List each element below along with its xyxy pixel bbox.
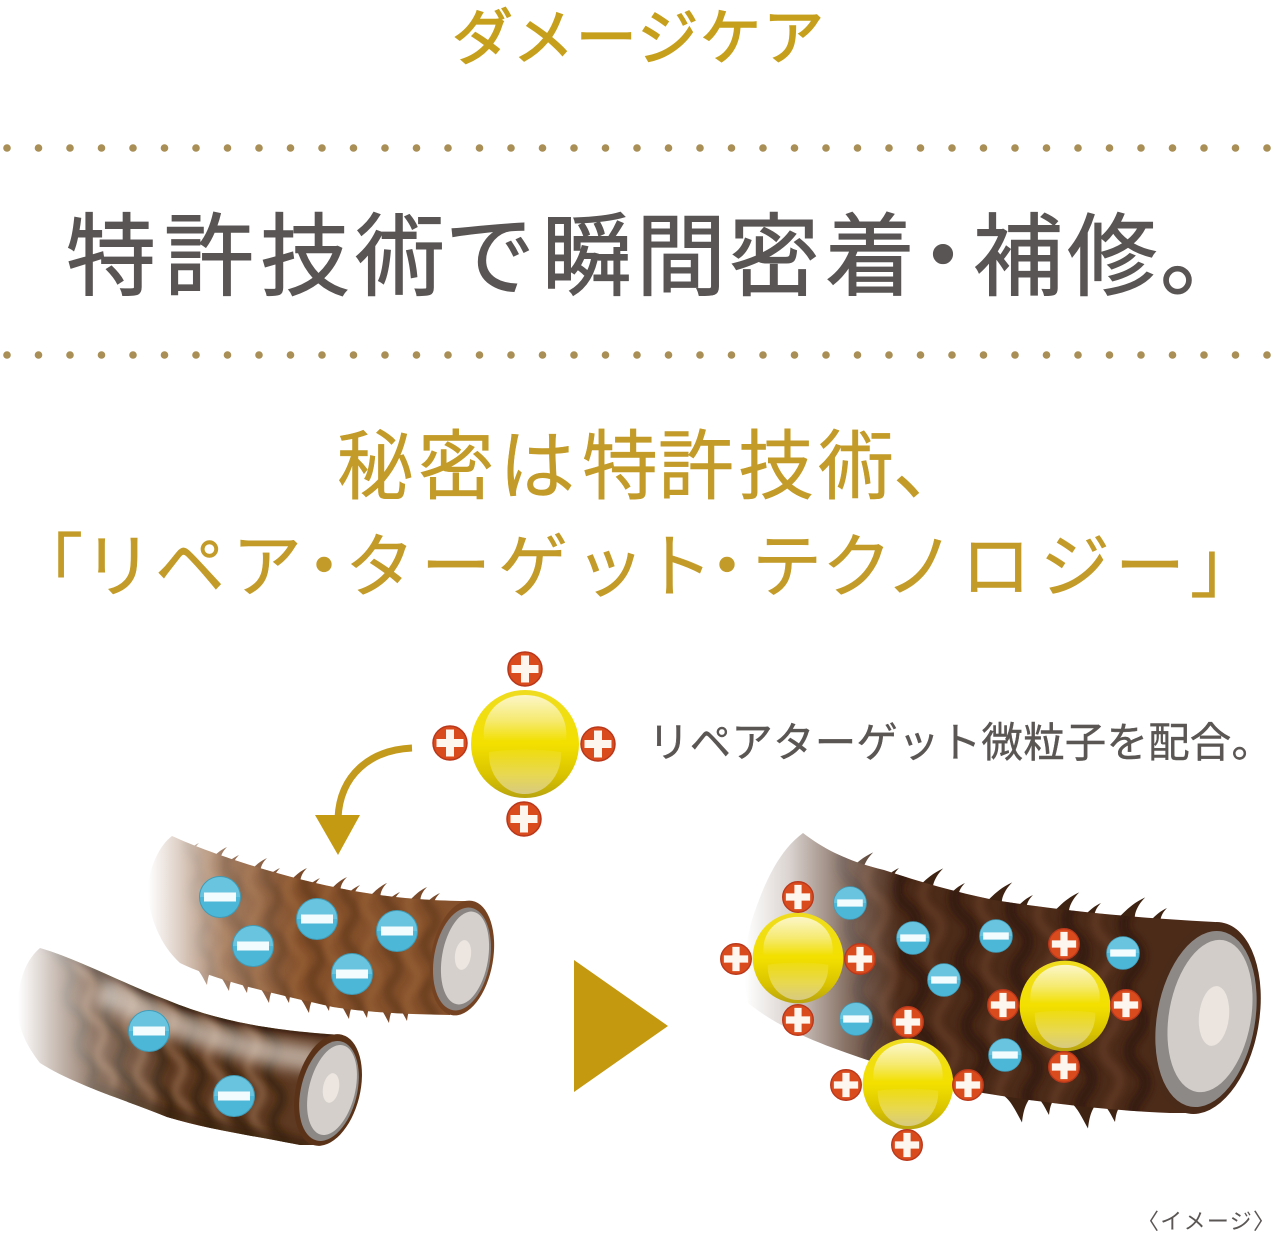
hair: upper left healthy brown (152, 836, 494, 1023)
hair top cuticle spikes (194, 843, 440, 900)
image note: 〈イメージ〉 (1137, 1209, 1274, 1234)
negative charges on damaged hair (128, 1010, 254, 1116)
hair: repaired with particles (721, 820, 1274, 1160)
hair top cuticle spikes (858, 852, 1167, 919)
subheading line 1: 秘密は特許技術、 (337, 425, 969, 510)
particle bound right (988, 929, 1141, 1082)
particle bound bottom (831, 1007, 983, 1160)
hair bottom cuticle spikes (198, 971, 408, 1023)
particle caption: リペアターゲット微粒子を配合。 (648, 719, 1273, 766)
dotted divider bottom (3, 351, 1271, 359)
negative charges on healthy hair (200, 876, 418, 994)
particle bound left (721, 882, 875, 1035)
negative charges on repaired hair (834, 887, 1139, 1071)
arrow: big triangle (574, 960, 668, 1092)
hair: lower left damaged (22, 948, 362, 1146)
dotted divider top (3, 144, 1271, 152)
hair cross section (1135, 913, 1274, 1123)
title: damage care: ダメージケア (452, 4, 824, 72)
subheading line 2: 「リペア・ターゲット・テクノロジー」 (13, 528, 1260, 606)
main heading: 特許技術で瞬間密着・補修。 (66, 208, 1250, 308)
icon: repair target particle (433, 652, 615, 836)
arrow: curved down to hair (315, 748, 412, 855)
hair bottom cuticle spikes (1004, 1096, 1118, 1128)
hair cross section (421, 895, 503, 1021)
hair cross section (283, 1027, 373, 1153)
